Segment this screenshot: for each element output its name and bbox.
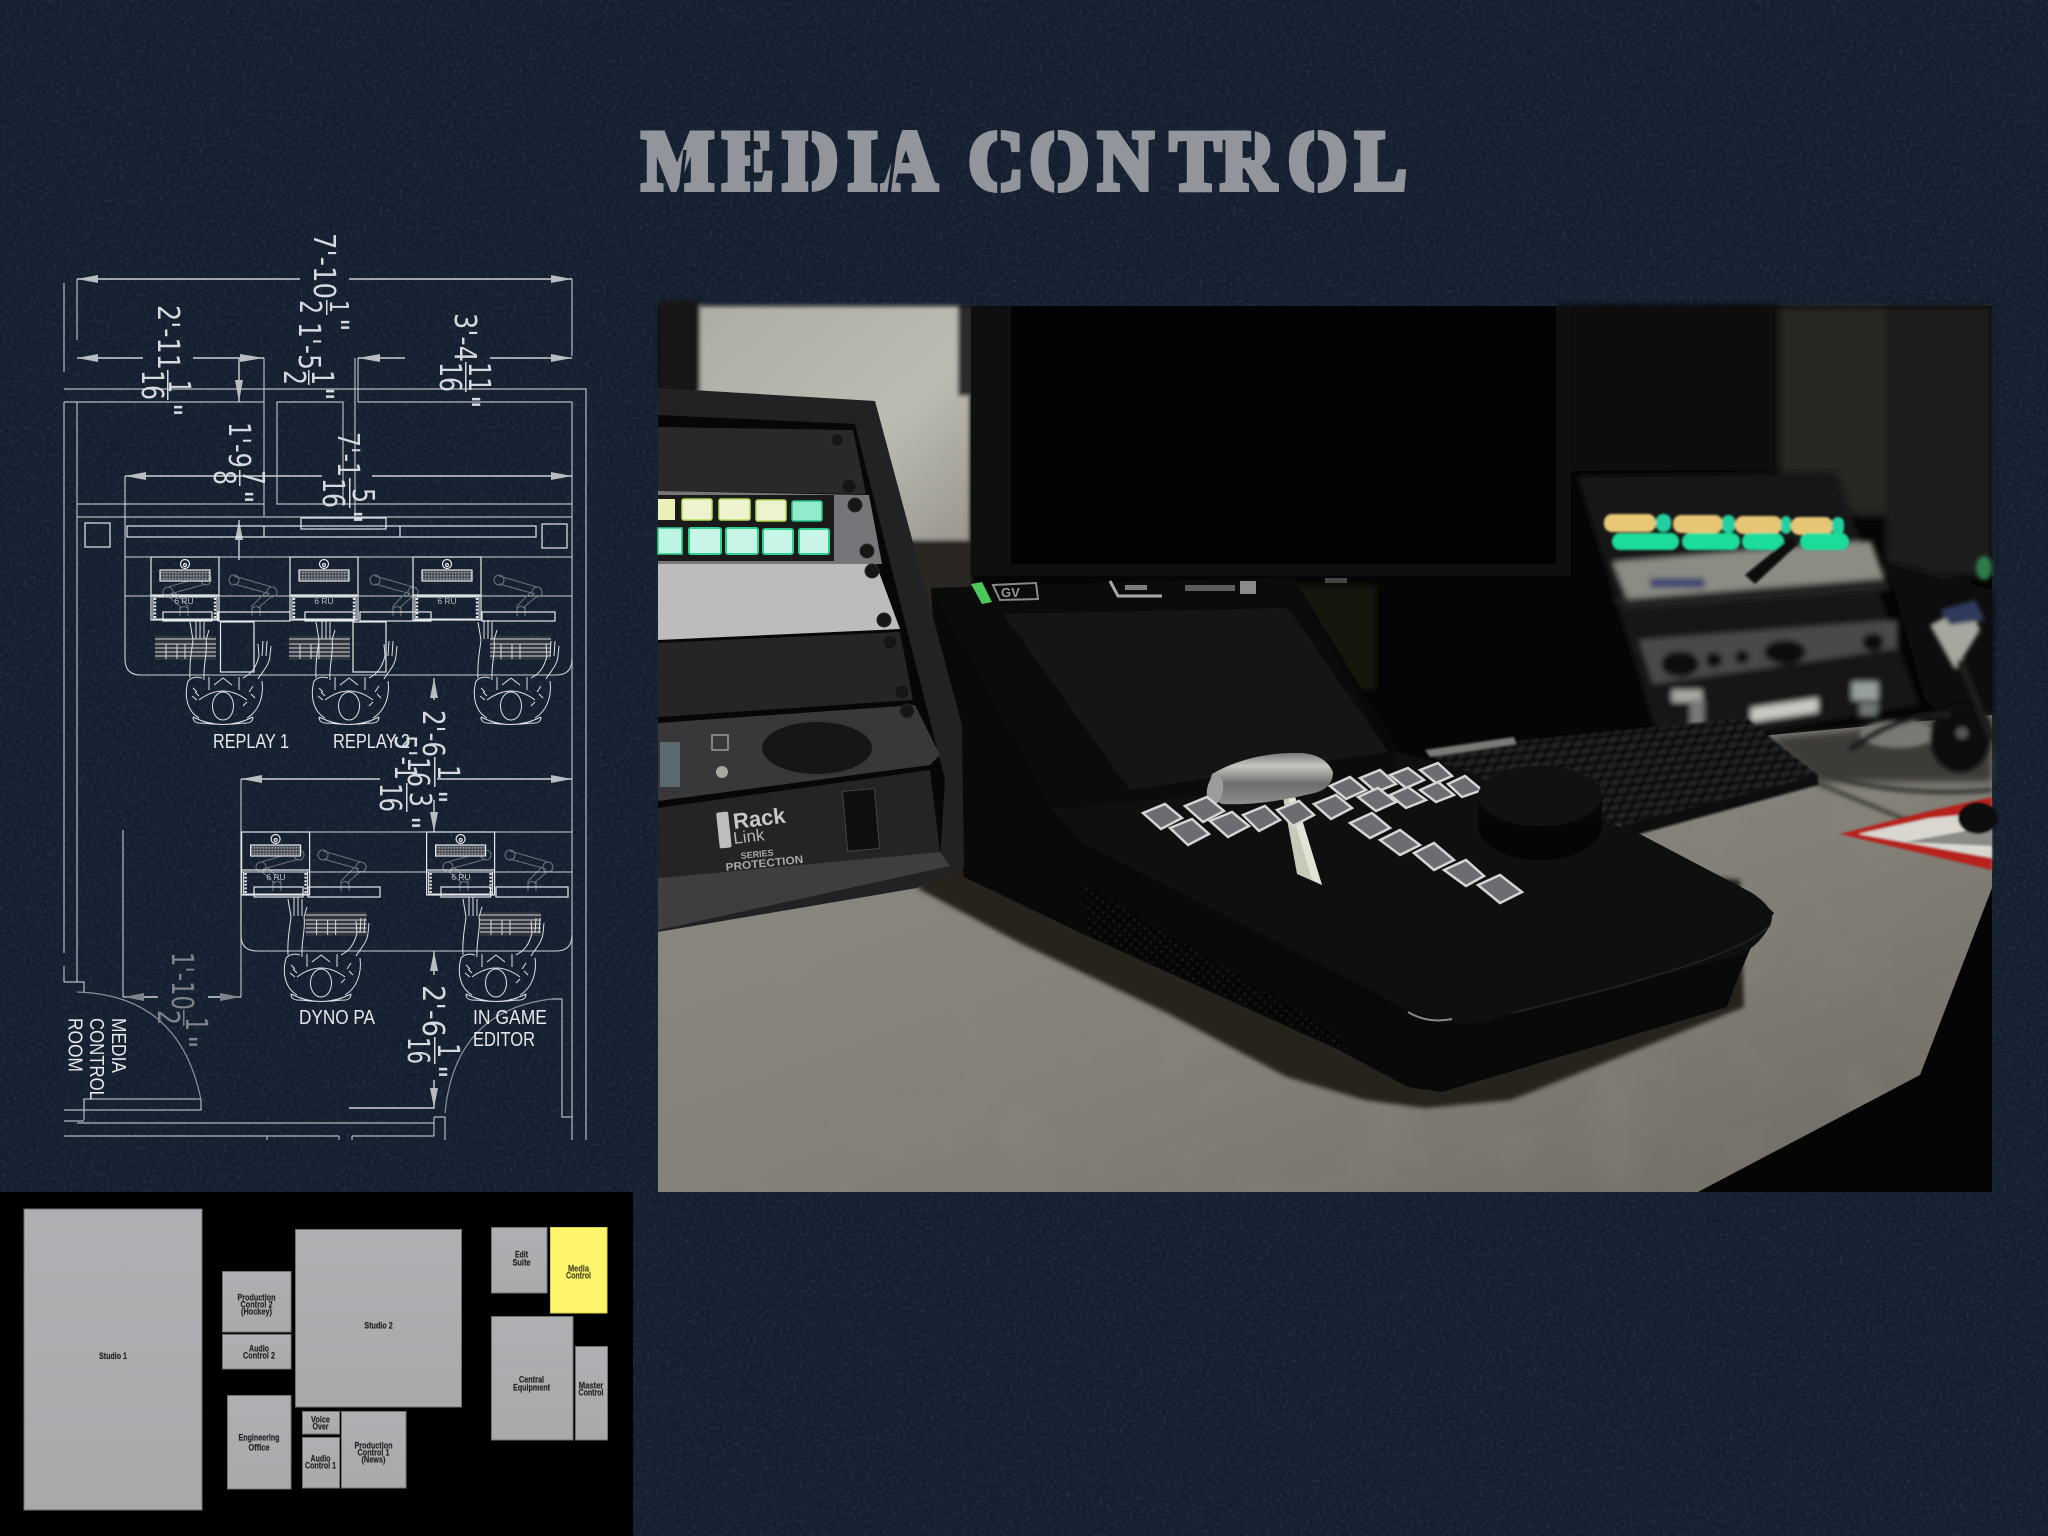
dimension: 1'-10 1/2: ": [167, 1035, 202, 1049]
dimension: 2'-11 1/16: ": [152, 403, 187, 417]
room: Voice Over: Over: [312, 1422, 329, 1432]
keyboards top row: [155, 636, 551, 660]
room: Media Control, highlighted: Media: [568, 1264, 590, 1274]
rack button panel: [658, 491, 882, 564]
room: Master Control: Master: [579, 1380, 603, 1392]
RackLink unit: PROTECTION: [725, 854, 804, 874]
dimension: 5'-1 3/16: ": [390, 816, 425, 830]
seat labels: [213, 731, 547, 1051]
RackLink unit: Link: [732, 825, 766, 848]
dimension: 1'-9 7/8: 7: [235, 470, 270, 485]
room: Voice Over: Voice: [311, 1414, 330, 1426]
desk surface: [658, 715, 1992, 1192]
workstation: top row units: 6 RU: [437, 596, 457, 606]
operators top row: [186, 620, 559, 724]
keyboard: [1425, 718, 1818, 838]
workstation: bottom row units: [242, 832, 495, 895]
desk shadow of console: [917, 800, 1744, 1108]
main monitor: [971, 306, 1571, 576]
room: Central Equipment: Central: [519, 1374, 544, 1386]
dimension: 2'-11 1/16: 1: [161, 380, 196, 393]
top desk: [125, 476, 572, 675]
dimension: overall width: [292, 233, 354, 332]
far rack LED rows: [1604, 514, 1849, 584]
console key caps: [1143, 763, 1522, 903]
RackLink unit: SERIES: [740, 848, 774, 861]
wall behind equipment: [658, 300, 980, 620]
background monitors and wall, right side: [1290, 306, 1992, 760]
console body: [931, 577, 1774, 1092]
dimension: overall width: 7'-10: [306, 233, 341, 299]
seat labels: REPLAY 2: [333, 731, 410, 753]
dimension: 1'-10 1/2: 2: [150, 1010, 185, 1025]
dimension lines: [77, 279, 572, 1108]
room: Production Control 2: [222, 1272, 291, 1332]
room: Production Control 1: Production: [354, 1440, 393, 1452]
dimension: 5'-1 3/16: 16: [372, 783, 407, 812]
keyboards bottom row: [306, 912, 541, 936]
dimension: 7'-1 5/16: [315, 432, 380, 524]
rack dark panel: [658, 632, 913, 717]
dimension: 3'-4 11/16: [432, 313, 496, 409]
dimension: 3'-4 11/16: 16: [432, 362, 467, 392]
console vent: [1081, 883, 1345, 1050]
facility map panel: [0, 1192, 633, 1536]
dimension: 7'-1 5/16: 5: [345, 488, 380, 503]
workstation: bottom row units: 6 RU: [451, 872, 471, 882]
console top surface: [1052, 752, 1772, 1023]
monitor arms: [163, 575, 553, 891]
knob: [1478, 766, 1602, 860]
dimension: lower 2'-6 1/16: [400, 985, 465, 1079]
room: Master Control: [576, 1346, 608, 1440]
room: Audio Control 1: Control 1: [305, 1460, 337, 1472]
room: Studio 2: Studio 2: [364, 1320, 393, 1332]
dimension: 2'-11 1/16: 2'-11: [150, 305, 185, 370]
wall and extension lines: [64, 279, 586, 1140]
rack frame: [658, 388, 964, 932]
connector on right: [1930, 556, 1992, 740]
dimension: upper 2'-6 1/16: [400, 710, 465, 804]
dimension: overall width: 1: [323, 300, 353, 313]
dimension: overall width: ": [319, 318, 354, 332]
dimension: 1'-5 1/2: [276, 322, 339, 401]
left equipment rack: [658, 388, 964, 932]
dimension: upper 2'-6 1/16: ": [417, 790, 452, 804]
dimension: 7'-1 5/16: 16: [315, 478, 350, 508]
room: Studio 2: [296, 1230, 462, 1407]
console upper panel: [931, 577, 1400, 810]
dimension: 2'-11 1/16: 16: [134, 370, 169, 400]
room: Audio Control 2: Control 2: [243, 1350, 275, 1362]
dimension: 5'-1 3/16: 3: [402, 792, 437, 807]
dimension: 3'-4 11/16: 11: [461, 362, 496, 392]
workstation: top row units: 6 RU: [314, 596, 334, 606]
dimension: lower 2'-6 1/16: 16: [400, 1037, 435, 1064]
room: Audio Control 1: Audio: [310, 1454, 331, 1464]
wall cabinets: [85, 518, 567, 548]
rack blank panel: [658, 427, 866, 494]
room: Production Control 1: [342, 1412, 406, 1488]
desk dark area behind headphones: [1770, 716, 1992, 782]
seat labels: IN GAME: [473, 1007, 547, 1029]
dimension: upper 2'-6 1/16: 16: [400, 757, 435, 787]
photo: control room switcher: [658, 300, 1998, 1192]
dimension: 1'-9 7/8: 1'-9: [221, 422, 256, 468]
room: Audio Control 2: Audio: [249, 1344, 269, 1354]
dimension arrowheads: [77, 275, 572, 1108]
room: Studio 1: Studio 1: [99, 1351, 128, 1362]
seat labels: REPLAY 1: [213, 731, 289, 753]
room: Production Control 2: Production: [238, 1292, 276, 1304]
dimension: 1'-5 1/2: ": [304, 387, 339, 401]
room name label: MEDIA: [107, 1018, 129, 1074]
dimension: 7'-1 5/16: ": [332, 510, 367, 524]
room: Engineering Office: [228, 1396, 291, 1489]
room: Studio 1: [24, 1209, 202, 1510]
room: Master Control: Control: [578, 1388, 604, 1398]
headphones and cables: [1810, 704, 1992, 830]
dimension: 7'-1 5/16: 7'-1: [330, 432, 365, 477]
dimension: 1'-10 1/2: 1'-10: [164, 952, 199, 1010]
room: Media Control, highlighted: [550, 1228, 607, 1313]
dimension: upper 2'-6 1/16: 2'-6: [415, 710, 450, 757]
mouse pad: [1840, 797, 1998, 870]
room: Edit Suite: Suite: [512, 1258, 530, 1268]
dimension: 2'-11 1/16: [134, 305, 196, 417]
room: Edit Suite: [492, 1228, 547, 1293]
dimension: 1'-5 1/2: 1'-5: [291, 322, 326, 370]
rack silver panel: [658, 564, 900, 640]
shelves bottom row: [254, 887, 568, 897]
rack screws: [831, 434, 914, 718]
seat labels: DYNO PA: [299, 1007, 376, 1029]
dimension: 1'-9 7/8: [206, 422, 270, 504]
workstation: top row units: [151, 557, 481, 620]
room: Engineering Office: Engineering: [238, 1432, 280, 1444]
dimension: lower 2'-6 1/16: 2'-6: [415, 985, 450, 1037]
dimension: 1'-10 1/2: 1: [178, 1017, 213, 1031]
room: Central Equipment: [492, 1316, 573, 1440]
rack speaker unit: [658, 705, 940, 801]
room: Voice Over: [302, 1412, 340, 1434]
dimension: 1'-9 7/8: 8: [206, 470, 241, 485]
room name label: [64, 1018, 129, 1100]
dimension: overall width: 2: [292, 300, 327, 314]
workstation: bottom row units: 6 RU: [266, 872, 286, 882]
room name label: CONTROL: [85, 1018, 107, 1100]
dimension: 3'-4 11/16: 3'-4: [447, 313, 482, 362]
dimension: 5'-1 3/16: [372, 735, 437, 830]
dimension: 1'-10 1/2: [150, 952, 213, 1049]
RackLink unit: Rack: [732, 803, 788, 834]
photo base: [658, 306, 1992, 1192]
dimension: lower 2'-6 1/16: ": [417, 1065, 452, 1079]
dimension: 5'-1 3/16: 5'-1: [387, 735, 422, 780]
workstation: top row units: 6 RU: [174, 596, 194, 606]
room: Edit Suite: Edit: [515, 1250, 529, 1260]
room name label: ROOM: [64, 1018, 86, 1072]
operators bottom row: [284, 897, 544, 1002]
dimension: 1'-9 7/8: ": [223, 490, 258, 504]
RackLink unit: [658, 770, 950, 930]
title: MEDIA CONTROL: [642, 114, 1406, 208]
shelves top row: [163, 612, 555, 672]
room: Audio Control 2: [222, 1334, 291, 1369]
dimension: 1'-5 1/2: 2: [276, 370, 311, 385]
T-bar handle: [1205, 753, 1333, 885]
room: Central Equipment: Equipment: [513, 1382, 551, 1394]
dimension: 1'-5 1/2: 1: [304, 370, 339, 385]
seat labels: EDITOR: [473, 1029, 535, 1051]
console upper panel: GV: [1001, 585, 1020, 600]
room: Production Control 2: (Hockey): [241, 1306, 272, 1318]
room: Production Control 2: Control 2: [240, 1300, 272, 1310]
bottom desk: [241, 832, 572, 951]
far rack: [1577, 472, 1920, 736]
dimension: upper 2'-6 1/16: 1: [430, 765, 465, 780]
room: Production Control 1: Control 1: [358, 1448, 390, 1458]
dimension: 3'-4 11/16: ": [450, 395, 485, 409]
floor plan drawing: [64, 233, 586, 1140]
dimension: lower 2'-6 1/16: 1: [430, 1043, 465, 1058]
room: Audio Control 1: [302, 1438, 340, 1488]
room: Engineering Office: Office: [248, 1442, 270, 1454]
room: Media Control, highlighted: Control: [566, 1270, 591, 1282]
room: Production Control 1: (News): [362, 1454, 386, 1466]
